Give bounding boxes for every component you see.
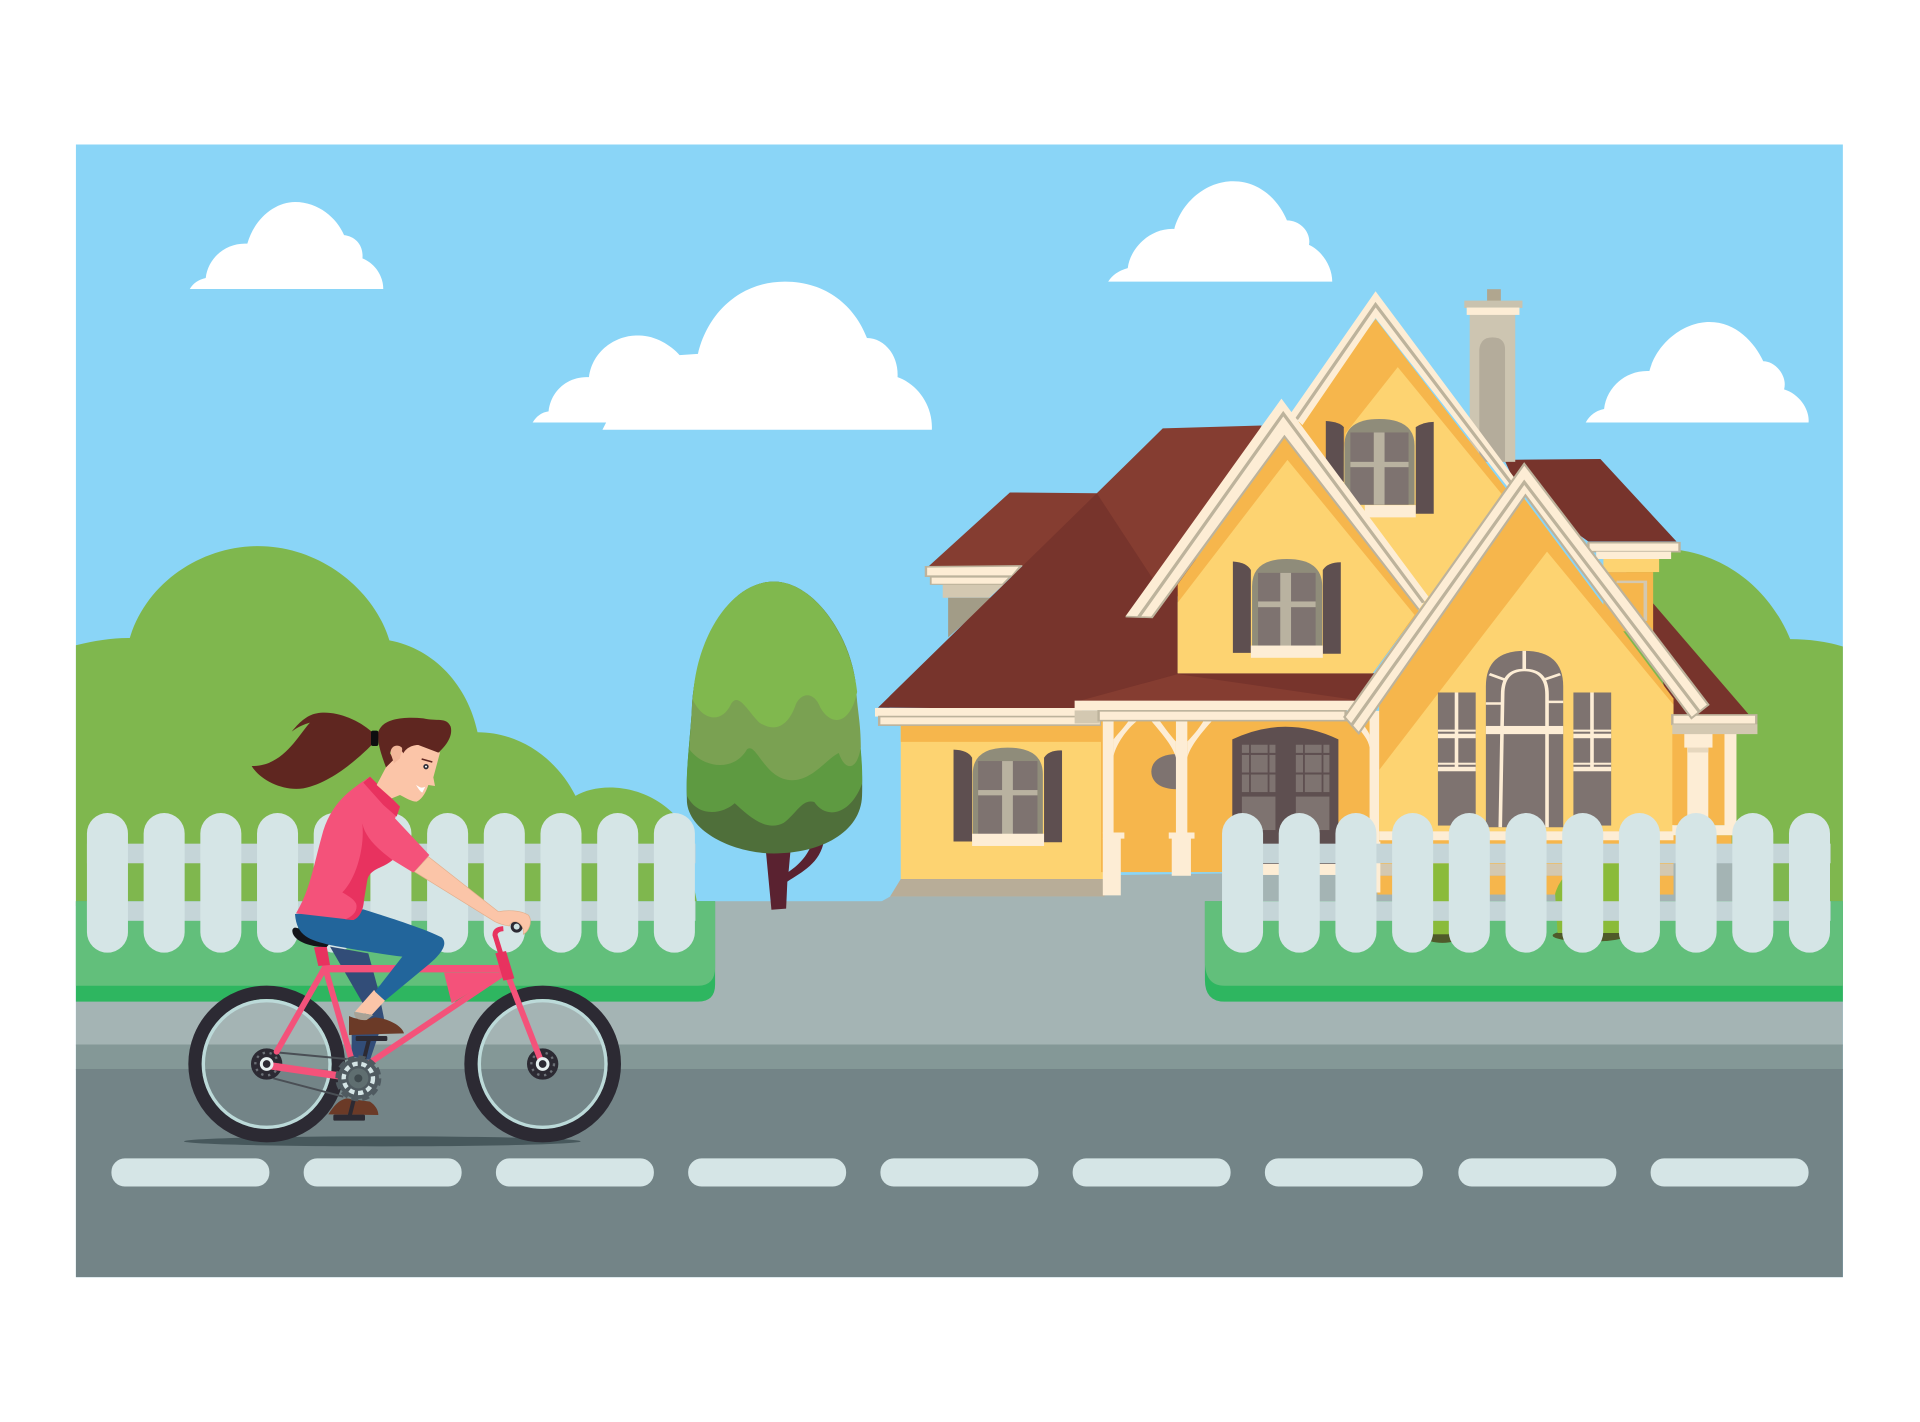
hair tie <box>371 731 378 746</box>
chainring <box>337 1057 380 1100</box>
ear <box>391 746 402 763</box>
left side window <box>1438 692 1476 826</box>
porch roof <box>1075 673 1376 724</box>
porch columns <box>1103 711 1380 895</box>
cloud: large centre <box>533 282 932 430</box>
smile <box>416 785 425 793</box>
hub centres <box>261 1059 548 1069</box>
middle window <box>1233 559 1341 658</box>
front wheel <box>471 992 614 1136</box>
main roof dark <box>878 493 1178 709</box>
fence: left <box>87 813 696 953</box>
saddle <box>292 928 329 947</box>
far leg and shoe <box>328 947 384 1115</box>
left upper cornice <box>926 566 1021 637</box>
ground shadow <box>184 1136 581 1146</box>
neck and face <box>377 742 440 802</box>
rear wheel <box>195 992 338 1136</box>
hills: right <box>1592 548 1843 912</box>
crank and pedals <box>333 1036 387 1121</box>
front gable wall <box>1379 499 1674 841</box>
cyclist on bicycle <box>184 713 614 1146</box>
right lower roof <box>1639 588 1748 719</box>
arm <box>414 857 530 934</box>
lower facade behind fence <box>1263 831 1732 895</box>
tree <box>687 582 862 910</box>
cloud: right <box>1586 322 1809 422</box>
door <box>1232 727 1338 870</box>
middle gable wall <box>1178 437 1419 673</box>
jeans <box>295 909 444 1001</box>
main roof light <box>929 426 1262 597</box>
handlebar grip <box>511 921 523 933</box>
hair <box>378 718 451 767</box>
road shoulder <box>76 1044 1843 1070</box>
right cornice <box>1588 543 1680 559</box>
top gable wall <box>1295 319 1507 613</box>
right small wall <box>1603 556 1659 631</box>
top gable trim <box>1290 291 1515 488</box>
left lower wall <box>890 724 1105 897</box>
pavement <box>76 901 1843 1046</box>
hills: left <box>76 546 698 906</box>
front gable trim <box>1344 464 1708 733</box>
back right roof <box>1504 459 1677 541</box>
eye and brow <box>422 759 432 769</box>
cloud: top left <box>190 202 383 289</box>
cloud: top centre right <box>1108 181 1332 282</box>
near shoe <box>349 1012 404 1035</box>
ponytail <box>252 713 372 789</box>
road lane dashes <box>111 1158 1809 1187</box>
right side window <box>1573 692 1611 826</box>
left cornice <box>875 708 1101 725</box>
near ankle <box>355 990 385 1015</box>
middle gable trim <box>1126 399 1428 617</box>
shirt <box>296 777 429 920</box>
lawn: right <box>1205 901 1843 1002</box>
chimney <box>1464 289 1522 462</box>
walkway <box>872 858 1735 911</box>
bicycle frame <box>272 929 540 1076</box>
chain <box>273 1052 347 1097</box>
top window <box>1326 419 1434 517</box>
arched window <box>1486 651 1563 827</box>
road <box>76 1069 1843 1277</box>
rear hub <box>254 1051 279 1077</box>
front hub <box>530 1051 555 1077</box>
left lower window <box>954 748 1062 846</box>
lawn: left <box>76 901 715 1002</box>
round window <box>1151 754 1177 789</box>
side wall and column <box>1672 715 1757 835</box>
sky <box>76 144 1843 1277</box>
house <box>872 289 1757 911</box>
porch wall <box>1101 720 1379 872</box>
fence: right <box>1222 813 1831 953</box>
bushes behind fence <box>1425 863 1626 943</box>
